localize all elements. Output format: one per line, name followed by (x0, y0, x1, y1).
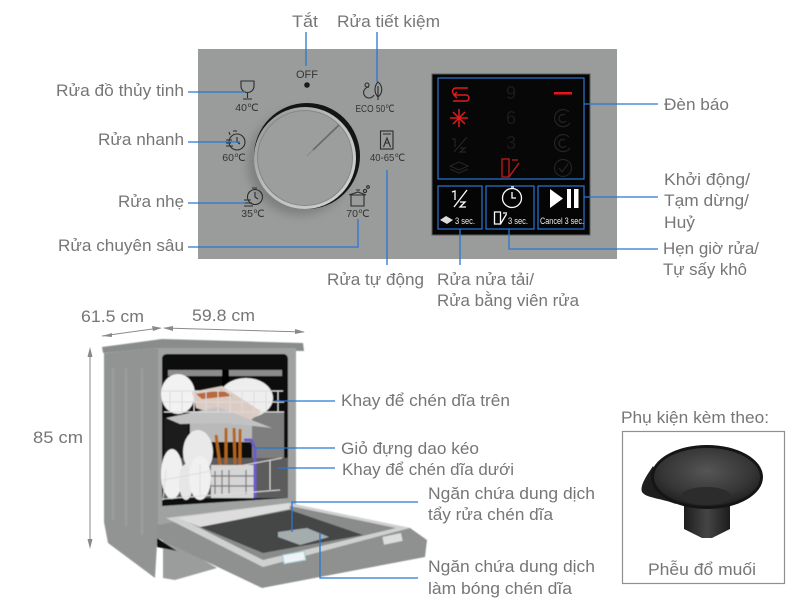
indicator: half load dim (452, 137, 467, 152)
door inner tub (200, 510, 363, 553)
dimension: depth (81, 307, 162, 337)
label: Khởi động / Tạm dừng / Huỷ (664, 170, 750, 232)
indicator: digit six: 6 (506, 108, 516, 128)
door panel (157, 503, 427, 588)
lower wire rack (162, 458, 282, 500)
label: Hẹn giờ rửa / Tự sấy khô: Tự sấy khô (663, 260, 747, 279)
icon: auto 40-65C: 40-65℃ (370, 152, 405, 164)
label: detergent compartment: tẩy rửa chén dĩa (428, 505, 554, 524)
icon: salt funnel (642, 445, 763, 538)
button: half load (438, 186, 482, 229)
dimension: height: 85 cm (33, 428, 83, 447)
dial knob (248, 103, 360, 215)
dispenser (278, 528, 329, 545)
indicator: tablet dim (450, 162, 468, 173)
indicator: red door (502, 159, 519, 177)
dishwasher illustration (102, 339, 427, 588)
door inner surface (188, 506, 396, 560)
label: detergent compartment: Ngăn chứa dung dịch (428, 484, 595, 503)
indicator: red star (450, 109, 468, 127)
off label (296, 69, 318, 88)
button: start pause: Cancel 3 sec. (540, 216, 584, 226)
panel: accessory box (622, 432, 784, 584)
label: Rửa nửa tải / Rửa bằng viên rửa (437, 270, 580, 310)
button: timer (486, 186, 534, 229)
dimension: width (163, 306, 305, 334)
indicator: digit nine: 9 (506, 83, 516, 103)
indicator: red wash symbol (453, 88, 469, 101)
label: Khởi động / Tạm dừng / Huỷ: Tạm dừng/ (664, 191, 749, 210)
shadow under door (157, 538, 177, 551)
upper wire rack (162, 391, 284, 412)
icon: quick wash 60C: 60℃ (222, 152, 246, 164)
door top strip (178, 503, 290, 527)
label: Giỏ đựng dao kéo: Giỏ đựng dao kéo (341, 439, 479, 458)
label: rinse aid compartment: Ngăn chứa dung dịch (428, 557, 595, 576)
label: Rửa nhanh: Rửa nhanh (98, 130, 184, 149)
interior (162, 354, 288, 506)
indicator: right dim icons (554, 110, 572, 176)
label: Rửa nửa tải / Rửa bằng viên rửa: Rửa bằng viên rửa (437, 291, 580, 310)
icon: pot 70C (346, 186, 370, 220)
button: timer: 3 sec. (508, 216, 528, 227)
label: Khởi động / Tạm dừng / Huỷ: Khởi động/ (664, 170, 750, 189)
label: Khay để chén dĩa dưới: Khay để chén dĩa dưới (342, 460, 514, 479)
label: Đèn báo: Đèn báo (664, 95, 729, 114)
icon: auto 40-65C (370, 131, 405, 164)
callout lines: control panel (188, 32, 658, 265)
label: Rửa nửa tải / Rửa bằng viên rửa: Rửa nửa tải/ (437, 270, 534, 289)
display (432, 74, 590, 235)
cutlery basket (211, 428, 255, 498)
label: Rửa chuyên sâu: Rửa chuyên sâu (58, 236, 184, 255)
side ribs (113, 368, 142, 535)
label: Hẹn giờ rửa / Tự sấy khô (663, 239, 759, 279)
door rim (166, 503, 410, 567)
icon: gentle wash 35C: 35℃ (241, 208, 265, 220)
label: rinse aid compartment (428, 557, 595, 598)
label: Rửa tiết kiệm: Rửa tiết kiệm (337, 12, 440, 31)
icon: eco 50C (356, 82, 395, 115)
label: Rửa tự động: Rửa tự động (327, 270, 424, 289)
icon: eco 50C: ECO 50℃ (356, 103, 395, 115)
plinth (163, 540, 217, 580)
lower dishes (161, 430, 288, 500)
button: half load: 3 sec. (455, 216, 475, 227)
icon: gentle wash 35C (241, 188, 265, 220)
icon: pot 70C: 70℃ (346, 208, 370, 220)
label: Tắt: Tắt (292, 12, 318, 31)
callout lines: dishwasher (255, 401, 418, 578)
label: Phễu đổ muối: Phễu đổ muối (648, 560, 756, 579)
icon: glass 40C: 40℃ (235, 102, 259, 114)
door symbols (382, 533, 403, 545)
dimension: depth: 61.5 cm (81, 307, 144, 326)
door sticker (282, 551, 306, 564)
icon: quick wash 60C (222, 131, 246, 164)
dimension: width: 59.8 cm (192, 306, 255, 325)
icon: glass 40C (235, 81, 259, 114)
panel: control panel (198, 49, 617, 259)
label: Hẹn giờ rửa / Tự sấy khô: Hẹn giờ rửa/ (663, 239, 759, 258)
off label: OFF (296, 69, 318, 81)
dimension: height (33, 347, 92, 549)
label: Rửa đồ thủy tinh: Rửa đồ thủy tinh (56, 81, 184, 100)
label: Rửa nhẹ: Rửa nhẹ (118, 192, 184, 211)
heading: accessories: Phụ kiện kèm theo: (621, 408, 769, 427)
label: Khay để chén dĩa trên: Khay để chén dĩa trên (341, 391, 510, 410)
indicator: red dash (554, 92, 572, 94)
cabinet side (104, 348, 158, 578)
top racks dishes (161, 374, 273, 428)
label: Khởi động / Tạm dừng / Huỷ: Huỷ (664, 213, 696, 232)
interior back wall (164, 370, 284, 462)
indicator: digit three: 3 (506, 133, 516, 153)
front frame (158, 348, 296, 535)
button: start pause (538, 186, 584, 229)
label: detergent compartment (428, 484, 595, 524)
label: rinse aid compartment: làm bóng chén dĩa (428, 579, 573, 598)
top cover (102, 339, 304, 353)
